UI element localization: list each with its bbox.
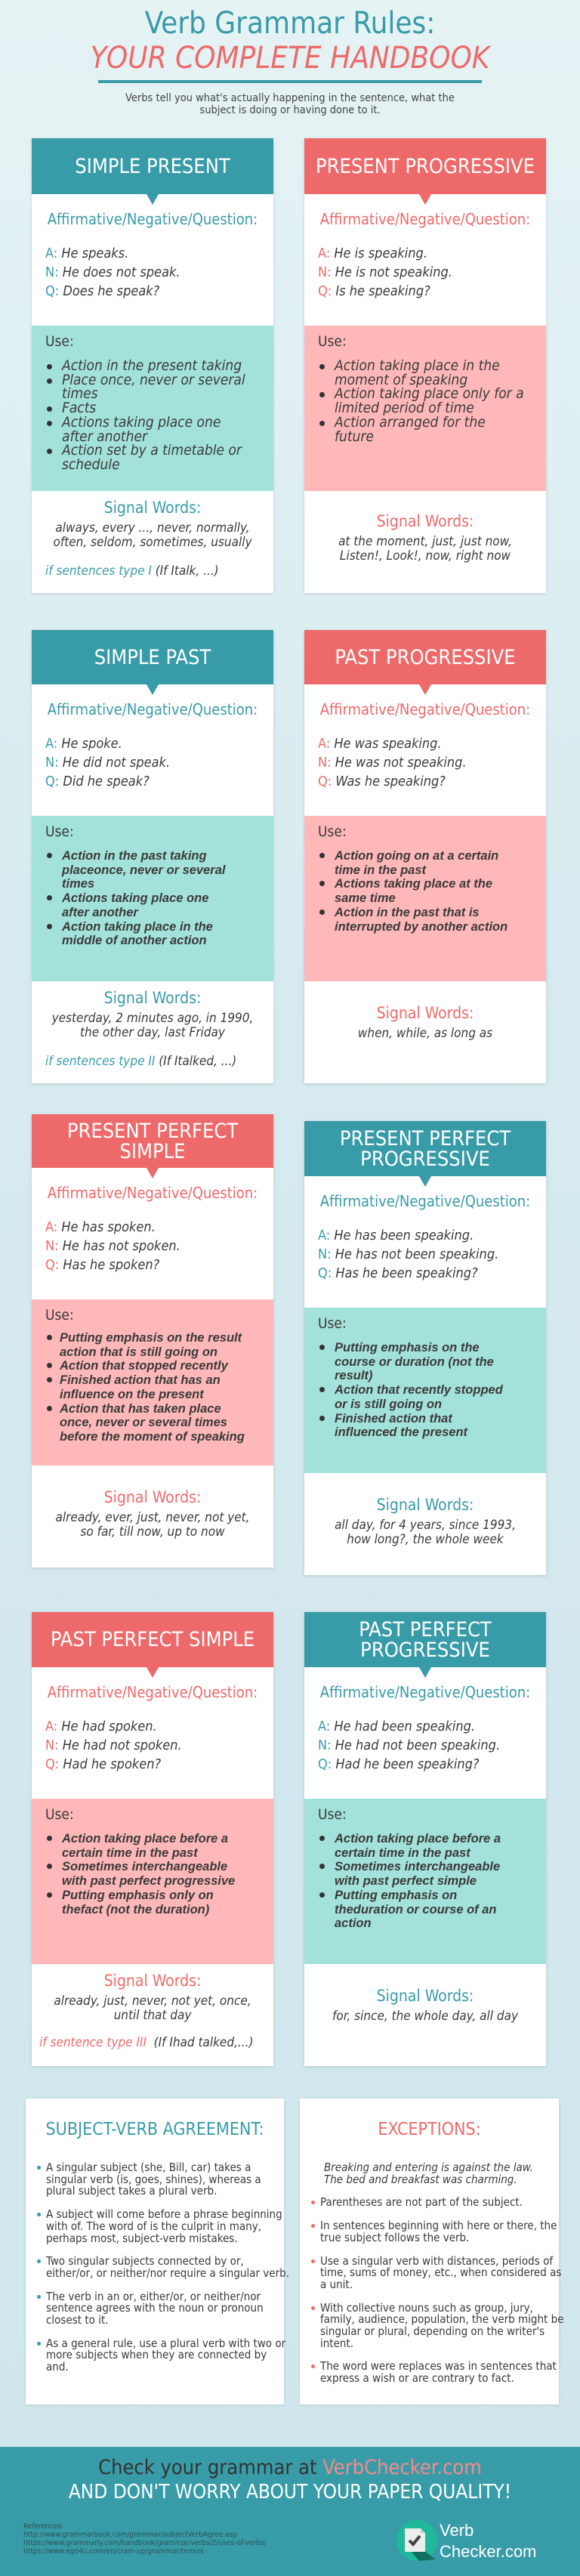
panel: present perfect simple: action that is still going on <box>60 1345 218 1359</box>
panel: past perfect simple: Affirmative/Negative/Question: <box>48 1683 258 1701</box>
panel: exceptions: a unit. <box>320 2278 353 2291</box>
call to action: Check your grammar at VerbChecker.com <box>98 2456 482 2479</box>
panel: exceptions: intent. <box>320 2337 353 2350</box>
panel: past progressive: Action going on at a certain <box>335 849 498 863</box>
panel: present perfect progressive: Use: <box>318 1315 347 1332</box>
panel: present perfect progressive: Putting emphasis on the <box>335 1341 480 1354</box>
panel: subject-verb agreement: either/or, or neither/nor require a singular verb. <box>46 2266 289 2280</box>
panel: present perfect simple: Action that has taken place <box>60 1402 221 1416</box>
panel: simple present: N: He does not speak. <box>45 264 180 280</box>
panel: exceptions: EXCEPTIONS: <box>378 2120 481 2139</box>
panel: past perfect progressive <box>304 1612 546 2066</box>
panel: present progressive: N: He is not speaking. <box>318 264 452 280</box>
panel: subject-verb agreement: plural subject takes a plural verb. <box>46 2184 217 2198</box>
panel: present perfect progressive: or is still going on <box>335 1398 442 1411</box>
panel: exceptions: Use a singular verb with distances, periods of <box>320 2254 553 2268</box>
panel: past perfect simple: Q: Had he spoken? <box>45 1756 161 1772</box>
panel: past perfect progressive: action <box>335 1917 372 1930</box>
panel: simple present: Q: Does he speak? <box>45 283 159 299</box>
panel: simple past: after another <box>62 906 138 919</box>
panel: past perfect progressive: N: He had not been speaking. <box>318 1737 500 1753</box>
logo: Verb <box>440 2521 474 2540</box>
panel: present perfect progressive: all day, for 4 years, since 1993, <box>335 1518 516 1533</box>
panel: subject-verb agreement: The verb in an or, either/or, or neither/nor <box>46 2290 261 2303</box>
panel: past perfect progressive: certain time in the past <box>335 1846 470 1860</box>
panel: simple present: Affirmative/Negative/Question: <box>48 210 258 228</box>
panel: simple past: Actions taking place one <box>62 891 208 905</box>
panel: simple present: Action in the present taking <box>62 357 242 374</box>
references: References: <box>23 2522 63 2531</box>
panel: exceptions: true subject follows the verb. <box>320 2231 469 2244</box>
panel: past progressive: when, while, as long as <box>358 1026 492 1041</box>
panel: present perfect simple: N: He has not spoken. <box>45 1238 180 1254</box>
panel: past progressive: A: He was speaking. <box>318 736 442 752</box>
panel: exceptions <box>300 2099 559 2405</box>
panel: present perfect simple: Q: Has he spoken? <box>45 1257 159 1273</box>
panel: present perfect simple <box>32 1114 273 1568</box>
panel: present perfect progressive: course or duration (not the <box>335 1355 494 1369</box>
panel: subject-verb agreement: SUBJECT-VERB AGREEMENT: <box>46 2120 264 2139</box>
panel: present progressive: moment of speaking <box>335 372 467 388</box>
panel: exceptions: The word were replaces was in sentences that <box>320 2359 557 2373</box>
panel: present progressive: Action arranged for the <box>335 414 486 431</box>
title <box>91 6 492 76</box>
panel: past perfect simple: A: He had spoken. <box>45 1719 157 1734</box>
panel: subject-verb agreement: and. <box>46 2360 69 2374</box>
references: https://www.grammarly.com/handbook/grammar/verbs/2/uses-of-verbs/ <box>23 2539 267 2547</box>
panel: present perfect simple: so far, till now, up to now <box>80 1524 225 1540</box>
panel: present perfect simple: Signal Words: <box>104 1488 201 1506</box>
panel: past perfect simple: Action taking place before a <box>62 1832 228 1846</box>
panel: past perfect progressive: Use: <box>318 1806 347 1823</box>
panel: past perfect progressive: PAST PERFECT <box>359 1618 492 1641</box>
panel: simple past: Q: Did he speak? <box>45 774 150 789</box>
panel: present progressive: PRESENT PROGRESSIVE <box>316 154 535 178</box>
panel: simple present: Actions taking place one <box>62 414 221 431</box>
panel: simple present: Place once, never or several <box>62 372 245 388</box>
panel: simple present: Action set by a timetable or <box>62 442 242 459</box>
panel: simple present: often, seldom, sometimes, usually <box>53 535 252 550</box>
panel: subject-verb agreement: A singular subject (she, Bill, car) takes a <box>46 2161 251 2174</box>
panel: past progressive <box>304 630 546 1083</box>
panel: present perfect simple: once, never or several times <box>60 1416 227 1429</box>
panel: present perfect simple: before the moment of speaking <box>60 1430 245 1444</box>
panel: present perfect progressive: Q: Has he been speaking? <box>318 1265 478 1281</box>
panel: simple past: SIMPLE PAST <box>94 645 211 669</box>
panel: present perfect simple: SIMPLE <box>119 1139 186 1163</box>
panel: past progressive: Use: <box>318 823 347 840</box>
panel: simple past: N: He did not speak. <box>45 755 170 771</box>
panel: present progressive: future <box>335 428 374 445</box>
panel: past perfect simple <box>32 1612 273 2066</box>
panel: simple present: if sentences type I (If Italk, ...) <box>45 564 219 579</box>
panel: past perfect progressive: Sometimes interchangeable <box>335 1860 500 1873</box>
panel: simple past: yesterday, 2 minutes ago, in 1990, <box>52 1011 253 1026</box>
panel: simple present: times <box>62 385 98 402</box>
panel: present progressive <box>304 138 546 593</box>
panel: subject-verb agreement: perhaps most, subject-verb mistakes. <box>46 2232 238 2245</box>
panel: exceptions: Parentheses are not part of the subject. <box>320 2195 523 2209</box>
panel: past perfect progressive: Signal Words: <box>377 1987 474 2005</box>
logo: Checker.com <box>440 2542 536 2561</box>
panel: present perfect simple: Action that stopped recently <box>60 1359 228 1373</box>
panel: simple past: Affirmative/Negative/Question: <box>48 700 258 718</box>
panel: past perfect simple: until that day <box>114 2008 191 2023</box>
panel: past perfect simple: thefact (not the duration) <box>62 1903 209 1917</box>
references <box>23 2522 267 2556</box>
panel: simple past: middle of another action <box>62 934 207 947</box>
panel: present perfect progressive: Signal Words: <box>377 1496 474 1514</box>
panel: subject-verb agreement: As a general rule, use a plural verb with two or <box>46 2337 285 2350</box>
panel: simple past: if sentences type II (If Italked, ...) <box>45 1054 236 1069</box>
panel: subject-verb agreement: Two singular subjects connected by or, <box>46 2254 244 2268</box>
panel: past progressive: Q: Was he speaking? <box>318 774 446 789</box>
panel: exceptions: In sentences beginning with here or there, the <box>320 2219 557 2232</box>
panel: past perfect progressive: theduration or course of an <box>335 1903 497 1917</box>
panel: present perfect simple: Finished action that has an <box>60 1373 221 1387</box>
panel: simple present: after another <box>62 428 147 445</box>
panel: present perfect progressive: how long?, the whole week <box>347 1532 504 1547</box>
panel: past perfect simple: Putting emphasis only on <box>62 1889 214 1902</box>
panel: past perfect progressive: PROGRESSIVE <box>360 1638 490 1662</box>
panel: simple present: Facts <box>62 400 96 416</box>
panel: simple present: SIMPLE PRESENT <box>75 154 230 178</box>
panel: subject-verb agreement: sentence agrees with the noun or pronoun <box>46 2301 264 2315</box>
panel: present perfect simple: already, ever, just, never, not yet, <box>56 1510 249 1525</box>
panel: simple past: placeonce, never or several <box>62 863 225 877</box>
panel: exceptions: family, audience, population, the verb might be <box>320 2312 563 2326</box>
panel: simple past: A: He spoke. <box>45 736 122 752</box>
panel: present perfect progressive: N: He has not been speaking. <box>318 1246 498 1262</box>
panel: simple past: Signal Words: <box>104 989 201 1007</box>
panel: simple past <box>32 630 273 1083</box>
subtitle <box>125 92 455 116</box>
title: Verb Grammar Rules: <box>145 6 435 41</box>
panel: past progressive: time in the past <box>335 863 426 877</box>
footer <box>0 2447 580 2576</box>
panel: simple past: Action in the past taking <box>62 849 207 863</box>
panel: present perfect simple: influence on the present <box>60 1388 204 1401</box>
panel: present perfect simple: Use: <box>45 1307 74 1324</box>
panel: past perfect progressive: A: He had been speaking. <box>318 1719 475 1734</box>
panel: present progressive: Listen!, Look!, now, right now <box>340 548 511 564</box>
panel: past perfect simple: Sometimes interchangeable <box>62 1860 227 1873</box>
panel: exceptions: express a wish or are contrary to fact. <box>320 2371 514 2385</box>
panel: subject-verb agreement: closest to it. <box>46 2313 109 2327</box>
logo <box>396 2520 536 2561</box>
panel: simple past: the other day, last Friday <box>80 1025 225 1040</box>
panel: past perfect simple: if sentence type III (If Ihad talked,...) <box>39 2035 253 2050</box>
panel: present progressive: A: He is speaking. <box>318 246 427 261</box>
panel: simple past: Action taking place in the <box>62 920 213 934</box>
panel: past perfect simple: PAST PERFECT SIMPLE <box>51 1628 255 1651</box>
footer: AND DON'T WORRY ABOUT YOUR PAPER QUALITY! <box>69 2481 511 2503</box>
references: http://www.grammarbook.com/grammar/subjectVerbAgree.asp <box>23 2531 237 2539</box>
panel: present progressive: Use: <box>318 333 347 350</box>
panel: past progressive: Actions taking place at the <box>335 877 492 891</box>
panel: exceptions: With collective nouns such as group, jury, <box>320 2301 533 2315</box>
panel: past perfect progressive: for, since, the whole day, all day <box>332 2009 518 2024</box>
panel: present perfect progressive: PRESENT PERFECT <box>340 1127 511 1150</box>
panel: present perfect progressive <box>304 1121 546 1575</box>
panel: present progressive: Action taking place in the <box>335 357 500 374</box>
panel: present progressive: Affirmative/Negative/Question: <box>320 210 530 228</box>
panel: exceptions: time, sums of money, etc., when considered as <box>320 2266 561 2279</box>
panel: present progressive: Q: Is he speaking? <box>318 283 430 299</box>
panel: past progressive: Affirmative/Negative/Question: <box>320 700 530 718</box>
panel: past progressive: PAST PROGRESSIVE <box>335 645 516 669</box>
panel: simple present: schedule <box>62 456 120 473</box>
panel: exceptions: Breaking and entering is against the law. <box>324 2161 533 2174</box>
panel: present progressive: Signal Words: <box>377 512 474 530</box>
panel: past perfect progressive: Q: Had he been speaking? <box>318 1756 480 1772</box>
panel: present perfect simple: A: He has spoken. <box>45 1219 156 1235</box>
panel: subject-verb agreement: more subjects when they are connected by <box>46 2348 267 2361</box>
subtitle: Verbs tell you what's actually happening in the sentence, what the <box>125 92 455 104</box>
panel: simple present: Use: <box>45 333 74 350</box>
panel: present perfect simple: PRESENT PERFECT <box>67 1120 238 1142</box>
panel: simple present: Signal Words: <box>104 499 201 517</box>
panel: present perfect progressive: Affirmative/Negative/Question: <box>320 1192 530 1210</box>
panel: exceptions: singular or plural, depending on the writer's <box>320 2324 545 2338</box>
panel: past progressive: Action in the past that is <box>335 906 480 919</box>
panel: past perfect simple: Signal Words: <box>104 1972 201 1990</box>
panel: past perfect simple: certain time in the past <box>62 1846 198 1860</box>
panel: present perfect progressive: PROGRESSIVE <box>360 1147 490 1171</box>
panel: past perfect progressive: Putting emphasis on <box>335 1889 457 1902</box>
panel: present progressive: at the moment, just, just now, <box>338 534 512 549</box>
panel: past perfect simple: N: He had not spoken. <box>45 1737 182 1753</box>
panel: simple past: Use: <box>45 823 74 840</box>
panel: present perfect progressive: Action that recently stopped <box>335 1383 503 1397</box>
panel: present perfect progressive: Finished action that <box>335 1412 452 1425</box>
panel: present perfect simple: Putting emphasis on the result <box>60 1331 242 1345</box>
panel: simple present: A: He speaks. <box>45 246 128 261</box>
subtitle: subject is doing or having done to it. <box>199 104 381 116</box>
panel: present progressive: Action taking place only for a <box>335 385 524 402</box>
panel: present perfect progressive: result) <box>335 1369 372 1382</box>
panel: past progressive: same time <box>335 891 396 905</box>
panel: past progressive: N: He was not speaking. <box>318 755 467 771</box>
panel: past progressive: interrupted by another action <box>335 920 508 934</box>
panel: present perfect progressive: A: He has been speaking. <box>318 1228 474 1243</box>
panel: present perfect simple: Affirmative/Negative/Question: <box>48 1184 258 1202</box>
panel: subject-verb agreement: singular verb (is, goes, shines), whereas a <box>46 2173 261 2186</box>
panel: past perfect progressive: Action taking place before a <box>335 1832 501 1846</box>
panel: past perfect simple: Use: <box>45 1806 74 1823</box>
panel: present perfect progressive: influenced the present <box>335 1425 467 1439</box>
references: https://www.ego4u.com/en/cram-up/grammar/tenses <box>23 2547 204 2556</box>
panel: past perfect simple: already, just, never, not yet, once, <box>54 1994 251 2009</box>
panel: past progressive: Signal Words: <box>377 1004 474 1022</box>
panel: subject-verb agreement: A subject will come before a phrase beginning <box>46 2207 282 2221</box>
panel: subject-verb agreement: with of. The word of is the culprit in many, <box>46 2219 261 2233</box>
panel: past perfect progressive: Affirmative/Negative/Question: <box>320 1683 530 1701</box>
panel: simple past: times <box>62 877 94 891</box>
panel: simple present <box>32 138 273 593</box>
panel: present progressive: limited period of time <box>335 400 474 416</box>
panel: past perfect progressive: with past perfect simple <box>335 1874 477 1888</box>
panel: exceptions: The bed and breakfast was charming. <box>324 2173 517 2186</box>
panel: past perfect simple: with past perfect progressive <box>62 1874 235 1888</box>
title: YOUR COMPLETE HANDBOOK <box>91 41 489 76</box>
panel: simple present: always, every ..., never, normally, <box>55 520 250 536</box>
panel: subject-verb agreement <box>26 2099 284 2405</box>
